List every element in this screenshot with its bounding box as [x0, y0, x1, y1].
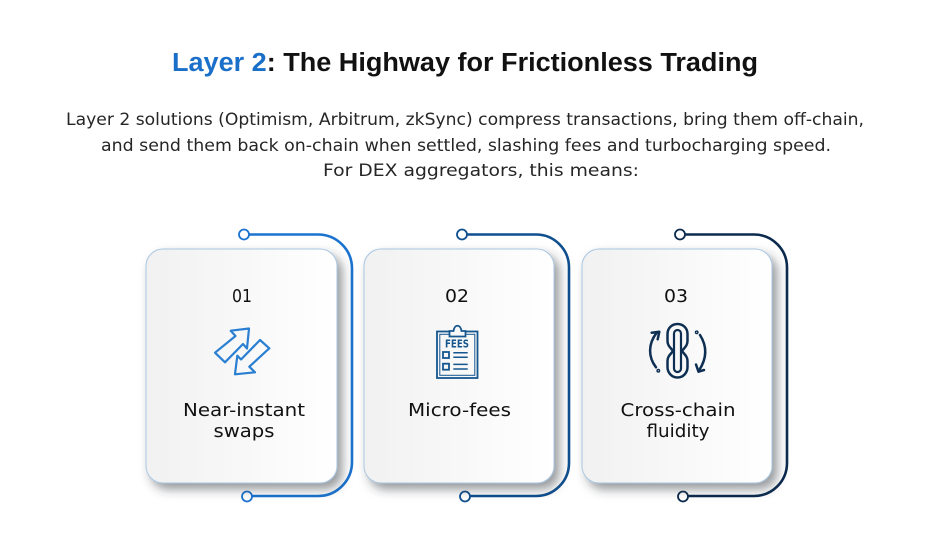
label: swaps	[214, 421, 274, 442]
label	[620, 400, 736, 442]
intro paragraph: and send them back on-chain when settled, slashing fees and turbocharging speed.	[101, 136, 831, 155]
number 01: 01	[232, 286, 252, 307]
intro paragraph: For DEX aggregators, this means:	[323, 161, 639, 180]
label: Cross-chain	[620, 400, 736, 421]
connector 2	[457, 230, 569, 502]
intro paragraph: Layer 2 solutions (Optimism, Arbitrum, zkSync) compress transactions, bring them off-chain,	[66, 110, 864, 129]
number 02: 02	[445, 286, 469, 307]
icon: fees clipboard: FEES	[445, 338, 469, 350]
connector 1	[239, 230, 352, 502]
panel: near-instant swaps	[146, 230, 352, 502]
label: Micro-fees	[408, 400, 511, 421]
title: Layer 2: The Highway for Frictionless Trading	[172, 49, 758, 77]
label: fluidity	[646, 421, 710, 442]
label: Near-instant	[183, 400, 305, 421]
card 1	[146, 249, 337, 483]
card 3	[582, 249, 772, 483]
icon: chain link with arrows	[650, 324, 705, 378]
icon: swap arrows	[215, 328, 269, 374]
panel: cross-chain fluidity	[582, 230, 787, 502]
intro paragraph	[66, 110, 864, 180]
panel: micro-fees	[364, 230, 569, 502]
number 03: 03	[664, 286, 688, 307]
connector 3	[675, 230, 787, 502]
icon: fees clipboard	[437, 326, 478, 378]
card 2	[364, 249, 554, 483]
label	[183, 400, 305, 442]
